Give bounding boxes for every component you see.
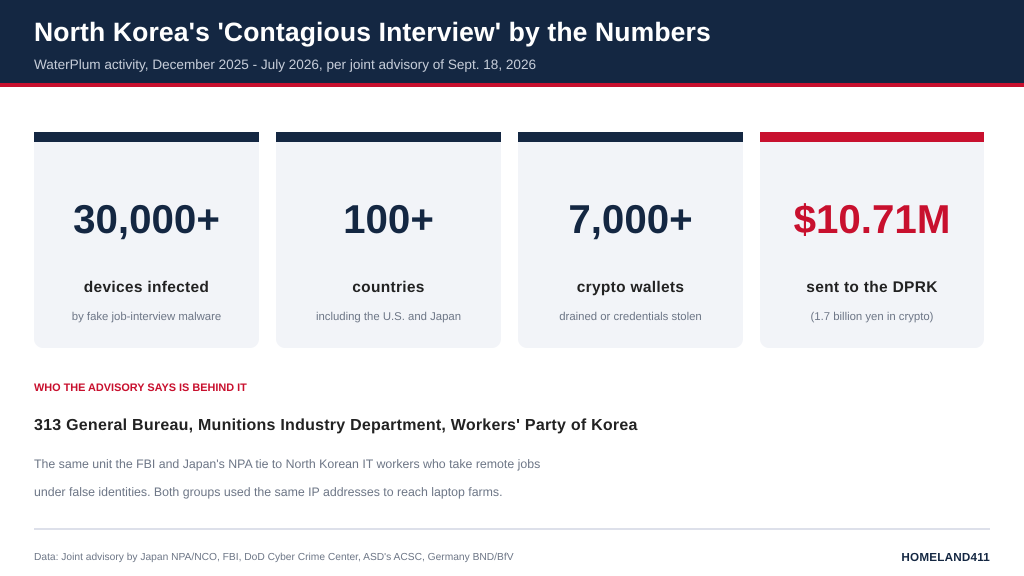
panel: sent to the DPRK	[760, 132, 984, 348]
header banner	[0, 0, 1024, 87]
subtitle: WaterPlum activity, December 2025 - July 2026, per joint advisory of Sept. 18, 2026	[34, 57, 536, 72]
panel: crypto wallets	[518, 132, 743, 348]
note: yen: (1.7 billion yen in crypto)	[811, 311, 933, 323]
title: North Korea's 'Contagious Interview' by the Numbers	[34, 17, 711, 47]
note: wallets: drained or credentials stolen	[559, 311, 702, 323]
label: crypto wallets: crypto wallets	[577, 279, 684, 296]
label: sent to the DPRK: sent to the DPRK	[806, 279, 938, 296]
stat: 7,000+: 7,000+	[568, 197, 693, 242]
section heading: 313 General Bureau, Munitions Industry Department, Workers' Party of Korea	[34, 417, 638, 434]
brand: HOMELAND411	[901, 551, 990, 564]
body text: The same unit the FBI and Japan's NPA tie to North Korean IT workers who take remote jobs	[34, 457, 540, 471]
stat: 100+: 100+	[343, 197, 434, 242]
panel: countries	[276, 132, 501, 348]
label: devices infected: devices infected	[84, 279, 209, 296]
source note: Data: Joint advisory by Japan NPA/NCO, FBI, DoD Cyber Crime Center, ASD's ACSC, Germany BND/BfV	[34, 552, 514, 563]
panel: devices infected	[34, 132, 259, 348]
body text	[34, 457, 540, 499]
header accent stripe	[0, 83, 1024, 87]
stat: $10.71M: $10.71M	[794, 197, 950, 242]
stat: 30,000+: 30,000+	[73, 197, 220, 242]
label: countries: countries	[352, 279, 425, 296]
note: countries: including the U.S. and Japan	[316, 311, 461, 323]
section eyebrow: WHO THE ADVISORY SAYS IS BEHIND IT	[34, 382, 247, 394]
body text: under false identities. Both groups used the same IP addresses to reach laptop farms.	[34, 485, 503, 499]
note: malware: by fake job-interview malware	[72, 311, 221, 323]
